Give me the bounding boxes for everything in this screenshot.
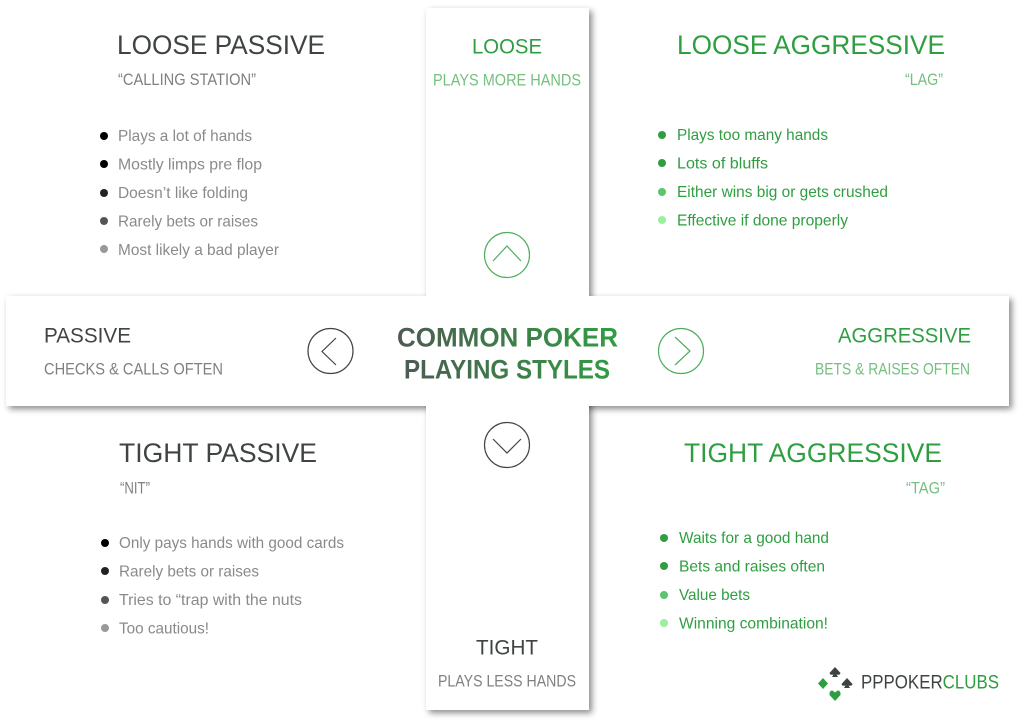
axis label: tight: PLAYS LESS HANDS	[438, 672, 576, 690]
logo	[818, 667, 999, 701]
list: loose passive traits	[100, 128, 280, 259]
list: tight passive traits: Rarely bets or raises	[119, 564, 259, 580]
heading: loose aggressive: LOOSE AGGRESSIVE	[677, 30, 945, 60]
icon: up arrow	[484, 232, 530, 278]
axis label: loose	[433, 36, 581, 90]
list: loose aggressive traits	[658, 127, 888, 230]
icon: card suits	[818, 667, 852, 701]
logo wordmark: PPPOKERCLUBS	[861, 672, 999, 694]
list: tight passive traits: Tries to “trap with the nuts	[119, 592, 302, 609]
list: loose aggressive traits: Lots of bluffs	[677, 156, 768, 172]
axis label: tight: TIGHT	[476, 636, 538, 660]
axis label: aggressive: AGGRESSIVE	[838, 324, 971, 348]
heading: loose passive: LOOSE PASSIVE	[117, 30, 325, 60]
icon: down arrow	[484, 422, 530, 468]
axis label: passive	[44, 324, 223, 378]
panel: loose passive	[100, 30, 325, 259]
heading: tight aggressive: TIGHT AGGRESSIVE	[684, 438, 942, 468]
list: tight passive traits: Only pays hands with good cards	[119, 535, 344, 552]
list: tight aggressive traits: Bets and raises often	[679, 558, 825, 576]
heading: tight passive: TIGHT PASSIVE	[119, 438, 317, 468]
icon: left arrow	[308, 328, 353, 374]
title: PLAYING STYLES	[404, 354, 610, 384]
list: loose passive traits: Rarely bets or raises	[118, 214, 258, 230]
axis label: passive: CHECKS & CALLS OFTEN	[44, 360, 223, 378]
panel: tight passive	[101, 438, 344, 638]
list: tight passive traits: Too cautious!	[119, 620, 209, 638]
panel: tight aggressive	[660, 438, 945, 632]
list: loose passive traits: Most likely a bad player	[118, 242, 280, 259]
list: tight passive traits	[101, 535, 344, 638]
axis label: loose: LOOSE	[472, 36, 542, 58]
axis label: aggressive: BETS & RAISES OFTEN	[815, 360, 970, 378]
list: loose passive traits: Mostly limps pre flop	[118, 156, 262, 174]
panel: loose aggressive	[658, 30, 945, 230]
axis label: passive: PASSIVE	[44, 324, 131, 348]
subheading: calling station: “CALLING STATION”	[118, 71, 256, 89]
list: tight aggressive traits: Value bets	[679, 587, 750, 604]
list: loose aggressive traits: Either wins big or gets crushed	[677, 184, 888, 201]
list: loose passive traits: Doesn’t like folding	[118, 185, 248, 202]
list: loose passive traits: Plays a lot of hands	[118, 128, 252, 145]
list: loose aggressive traits: Plays too many hands	[677, 127, 828, 144]
title	[397, 322, 618, 384]
list: loose aggressive traits: Effective if done properly	[677, 212, 848, 230]
list: tight aggressive traits: Winning combination!	[679, 616, 828, 632]
list: tight aggressive traits	[660, 530, 829, 632]
subheading: lag: “LAG”	[905, 71, 943, 89]
axis label: loose: PLAYS MORE HANDS	[433, 72, 581, 90]
axis label: aggressive	[815, 324, 971, 378]
icon: right arrow	[658, 328, 704, 374]
title: COMMON POKER	[397, 322, 618, 352]
axis label: tight	[438, 636, 576, 690]
subheading: nit: “NIT”	[120, 480, 150, 498]
subheading: tag: “TAG”	[906, 480, 945, 498]
list: tight aggressive traits: Waits for a good hand	[679, 530, 829, 547]
